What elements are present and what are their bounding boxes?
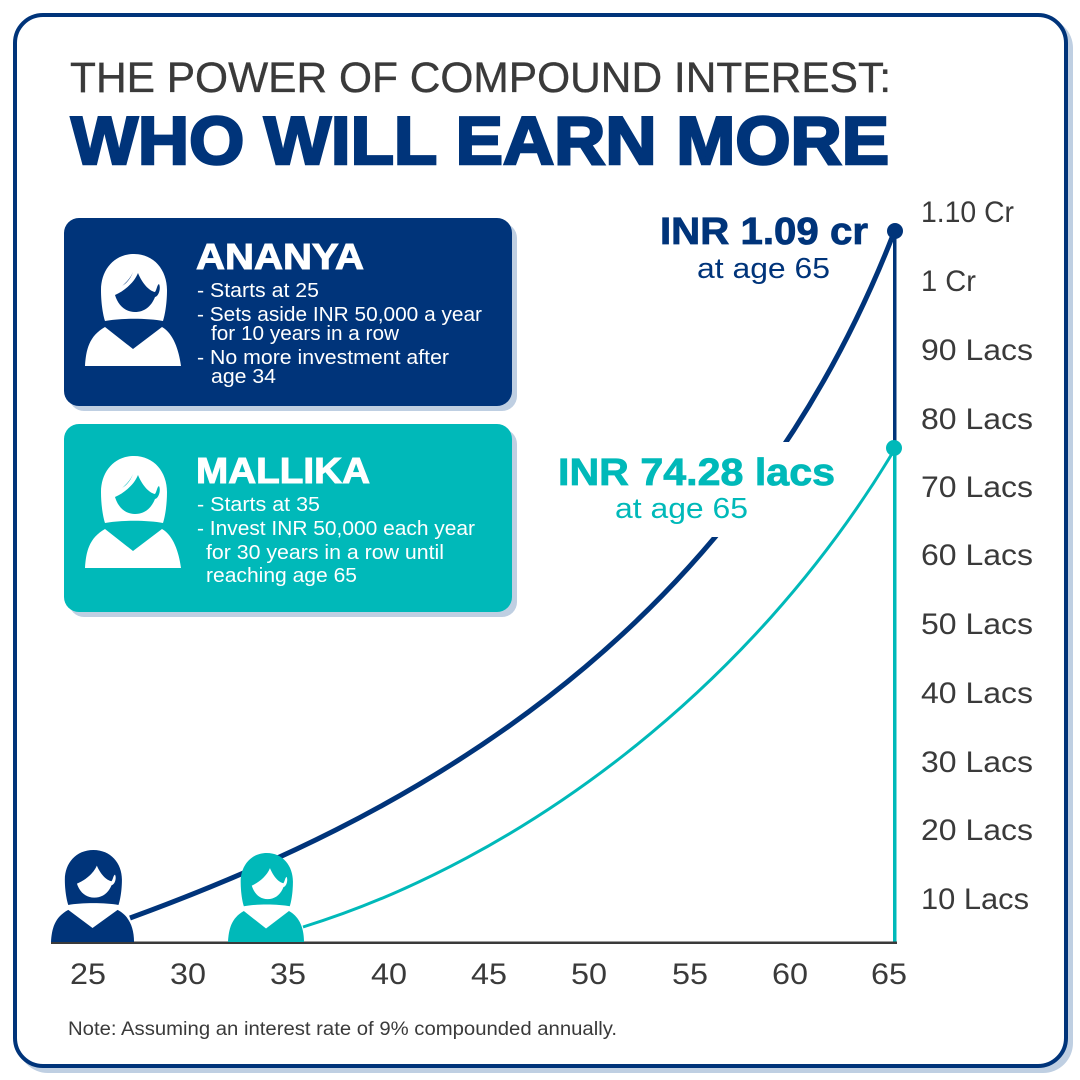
name: Mallika: MALLIKA: [196, 450, 370, 491]
y axis labels: [921, 196, 1033, 916]
y axis labels: 90 Lacs: [921, 334, 1033, 367]
vertical marker: Mallika: [893, 448, 896, 942]
value label: Mallika: [558, 452, 835, 525]
value label: Ananya: INR 1.09 cr: [660, 211, 868, 253]
icon: Ananya avatar: [85, 254, 181, 366]
y axis labels: 30 Lacs: [921, 746, 1033, 779]
details: Mallika: for 30 years in a row until: [206, 542, 444, 564]
icon: Ananya start marker: [51, 850, 134, 942]
y axis labels: 40 Lacs: [921, 677, 1033, 710]
x axis labels: 30: [170, 958, 206, 991]
dot: Mallika end value: [886, 440, 902, 456]
line chart: [51, 223, 903, 944]
details: Mallika: - Starts at 35: [197, 494, 320, 516]
title: [70, 55, 891, 179]
curve: Ananya: [130, 235, 893, 918]
panel: Ananya: [64, 218, 517, 411]
y axis labels: 50 Lacs: [921, 608, 1033, 641]
dot: Ananya end value: [887, 223, 903, 239]
y axis labels: 20 Lacs: [921, 814, 1033, 847]
name: Ananya: ANANYA: [196, 236, 364, 277]
y axis labels: 1 Cr: [921, 265, 976, 298]
x axis labels: 45: [471, 958, 507, 991]
icon: Mallika avatar: [85, 456, 181, 568]
details: Mallika: - Invest INR 50,000 each year: [197, 518, 475, 540]
label mask: [550, 442, 845, 537]
details: Mallika: [197, 494, 475, 587]
value label: Ananya: at age 65: [697, 253, 830, 285]
title: WHO WILL EARN MORE: [71, 103, 889, 179]
details: Mallika: reaching age 65: [206, 565, 357, 587]
details: Ananya: - No more investment after: [197, 347, 449, 369]
icon: Mallika start marker: [228, 853, 304, 942]
y axis labels: 10 Lacs: [921, 883, 1029, 916]
curve: Mallika: [303, 452, 893, 927]
vertical marker: Ananya: [893, 231, 896, 448]
footnote: Note: Assuming an interest rate of 9% compounded annually.: [68, 1019, 617, 1040]
details: Ananya: - Starts at 25: [197, 280, 319, 302]
x axis labels: 65: [871, 958, 907, 991]
x axis labels: 50: [571, 958, 607, 991]
value label: Mallika: at age 65: [615, 493, 748, 525]
panel: Mallika: [64, 424, 517, 617]
details: Ananya: for 10 years in a row: [211, 323, 400, 345]
details: Ananya: - Sets aside INR 50,000 a year: [197, 304, 482, 326]
x axis labels: 55: [672, 958, 708, 991]
y axis labels: 80 Lacs: [921, 403, 1033, 436]
details: Ananya: [197, 280, 482, 388]
x axis labels: 35: [270, 958, 306, 991]
x axis line: [51, 942, 897, 944]
title: THE POWER OF COMPOUND INTEREST:: [70, 55, 891, 102]
y axis labels: 60 Lacs: [921, 539, 1033, 572]
y axis labels: 70 Lacs: [921, 471, 1033, 504]
details: Ananya: age 34: [211, 366, 276, 388]
y axis labels: 1.10 Cr: [921, 196, 1014, 229]
x axis labels: 25: [70, 958, 106, 991]
value label: Ananya: [660, 211, 868, 285]
x axis labels: 40: [371, 958, 407, 991]
x axis labels: 60: [772, 958, 808, 991]
x axis labels: [70, 958, 907, 991]
value label: Mallika: INR 74.28 lacs: [558, 452, 835, 494]
